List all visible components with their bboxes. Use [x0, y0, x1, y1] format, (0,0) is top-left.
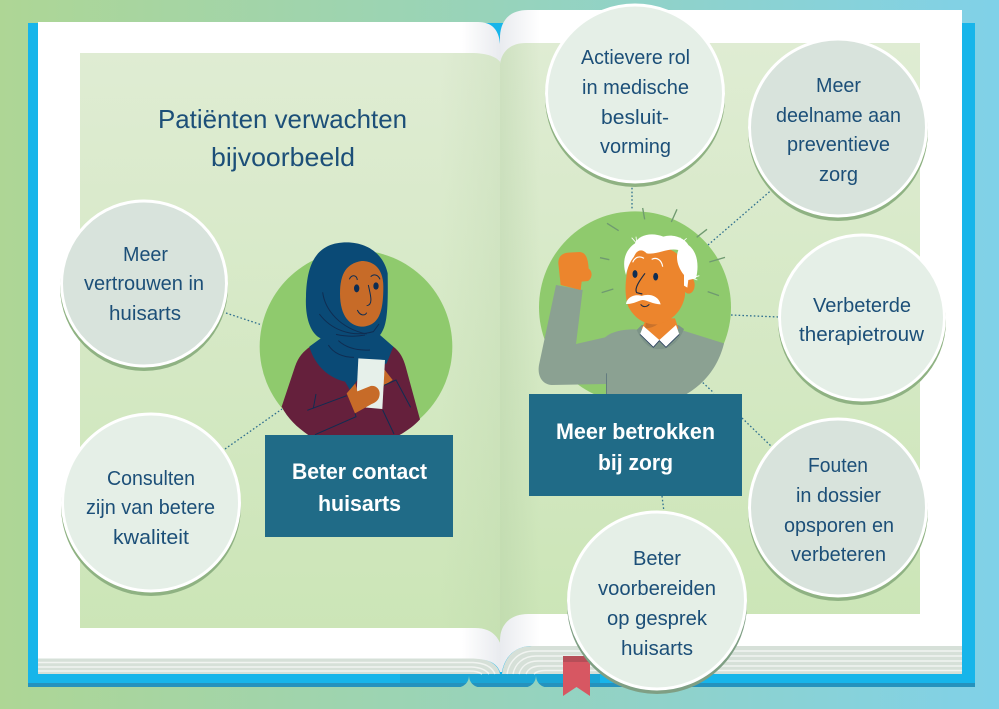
bubble: Fouten in dossier opsporen en verbeteren [748, 419, 928, 601]
woman's eyes [354, 282, 379, 292]
bubble: Meer deelname aan preventieve zorg: zorg [819, 164, 858, 186]
left green panel [80, 53, 501, 645]
bubble: Actievere rol in medische besluitvorming: in medische [582, 77, 689, 99]
bubble: Consulten zijn van betere kwaliteit: zijn van betere [86, 497, 215, 519]
woman's hijab [306, 242, 393, 390]
box: Meer betrokken bij zorg: Meer betrokken [556, 419, 715, 444]
right page edge lines [502, 646, 962, 674]
man's head [624, 234, 699, 349]
man's eyes [632, 270, 658, 280]
heading [158, 104, 407, 172]
bubble: Beter voorbereiden op gesprek huisarts [567, 512, 747, 694]
box: Meer betrokken bij zorg: bij zorg [598, 450, 673, 475]
bubble: Fouten in dossier opsporen en verbeteren: verbeteren [791, 544, 886, 566]
box: Beter contact huisarts [265, 435, 453, 537]
man's sweater and arm [539, 285, 724, 394]
bubble: Beter voorbereiden op gesprek huisarts: huisarts [621, 638, 693, 660]
woman's drawn lines [307, 275, 411, 435]
right page sheet [500, 10, 962, 672]
woman's coat [282, 347, 420, 438]
sweater fold [605, 373, 607, 394]
neck shadow [645, 322, 658, 328]
bubble: Consulten zijn van betere kwaliteit [61, 414, 241, 596]
bubble: Verbeterde therapietrouw [778, 235, 946, 405]
woman's front hand [347, 383, 380, 413]
woman's face [340, 261, 383, 327]
left page [38, 22, 501, 674]
box: Beter contact huisarts: huisarts [318, 491, 401, 516]
left page edge lines [38, 658, 500, 674]
bubble: Fouten in dossier opsporen en verbeteren: in dossier [796, 485, 881, 507]
man's eyebrows, nose and smile [633, 257, 663, 307]
left panel spine shading [440, 53, 501, 645]
man's hair [624, 234, 698, 288]
bubble: Beter voorbereiden op gesprek huisarts: voorbereiden [598, 578, 716, 600]
man's neck [642, 318, 678, 342]
right green panel [500, 43, 920, 640]
box: Meer betrokken bij zorg [529, 394, 742, 496]
bubble: Meer deelname aan preventieve zorg: Meer [816, 75, 861, 97]
man's moustache [626, 295, 661, 304]
right panel spine shading [500, 43, 540, 640]
illustration: older man raising fist [539, 208, 731, 403]
bubble: Meer deelname aan preventieve zorg [748, 39, 928, 221]
bubble: Fouten in dossier opsporen en verbeteren: opsporen en [784, 515, 894, 537]
bubble: Consulten zijn van betere kwaliteit: kwaliteit [113, 527, 189, 549]
bubble: Actievere rol in medische besluitvorming: Actievere rol [581, 47, 690, 69]
bookmark [563, 656, 590, 696]
man's ear [683, 276, 695, 294]
phone [356, 358, 385, 409]
collar shadow [637, 325, 684, 349]
bubble: Actievere rol in medische besluitvorming: vorming [600, 136, 671, 158]
bubble: Beter voorbereiden op gesprek huisarts: op gesprek [607, 608, 708, 630]
energy marks [600, 208, 725, 296]
bubble: Consulten zijn van betere kwaliteit: Consulten [107, 468, 195, 490]
bubble: Fouten in dossier opsporen en verbeteren: Fouten [808, 455, 868, 477]
bubble: Actievere rol in medische besluitvorming: besluit- [601, 107, 669, 129]
bubble: Verbeterde therapietrouw: Verbeterde [813, 295, 911, 317]
bubble: Verbeterde therapietrouw: therapietrouw [799, 324, 925, 346]
collar edge [640, 334, 679, 347]
bubble: Beter voorbereiden op gesprek huisarts: Beter [633, 548, 681, 570]
right page [500, 10, 962, 674]
bubble: Meer vertrouwen in huisarts: huisarts [109, 303, 181, 325]
hair wisps [632, 237, 699, 280]
heading: Patiënten verwachten [158, 104, 407, 134]
man's fist [558, 252, 592, 290]
woman's back hand [383, 369, 393, 386]
bubble: Meer deelname aan preventieve zorg: deelname aan [776, 105, 901, 127]
bubble: Meer vertrouwen in huisarts: vertrouwen in [84, 273, 204, 295]
bubble: Meer vertrouwen in huisarts [60, 201, 228, 371]
box: Beter contact huisarts: Beter contact [292, 459, 428, 484]
heading: bijvoorbeeld [211, 142, 355, 172]
man's face [626, 246, 685, 324]
bubble: Meer deelname aan preventieve zorg: preventieve [787, 134, 890, 156]
left page sheet [38, 22, 500, 672]
man's collar [640, 325, 679, 347]
illustration: woman with phone [260, 242, 452, 443]
bubble: Meer vertrouwen in huisarts: Meer [123, 244, 168, 266]
bubble: Actievere rol in medische besluitvorming [545, 5, 725, 187]
dotted connectors [225, 184, 779, 512]
